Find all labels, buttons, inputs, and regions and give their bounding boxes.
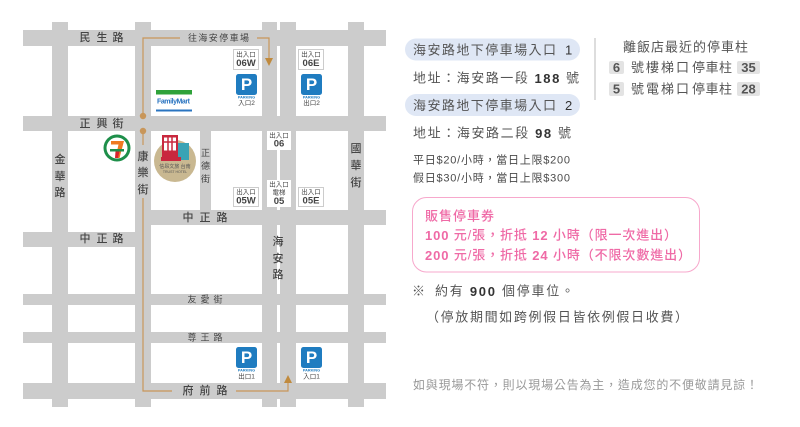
road labels: 正 [80, 117, 90, 130]
road labels: 街 [112, 116, 124, 130]
road labels: 正 [201, 148, 210, 158]
icon: FamilyMart: FamilyMart [157, 98, 191, 106]
road labels: 樂 [138, 165, 148, 179]
entrance 2 heading [405, 94, 580, 116]
road labels: 王 [200, 332, 210, 342]
icon: FamilyMart [156, 90, 192, 112]
arrow: down to entrance 2 [265, 58, 273, 66]
road labels: 華 [54, 170, 66, 183]
holiday rate: 假日$30/小時，當日上限$300 [413, 170, 570, 184]
pillar row 1 [609, 60, 760, 75]
road labels: 金 [54, 152, 66, 166]
entrance 2 heading: 2 [565, 98, 572, 113]
label: elevator exit 05: 05 [274, 196, 285, 207]
divider [594, 38, 596, 100]
road labels: 安 [272, 251, 284, 265]
label: exit 06E [298, 50, 324, 70]
icon: parking entrance 2: PARKING [238, 96, 255, 100]
entrance 1 heading: 1 [565, 42, 572, 58]
label: exit 06 [267, 130, 291, 150]
callout: parking vouchers: 販售停車券 [425, 208, 494, 224]
icon: parking exit 2: PARKING [303, 96, 320, 100]
pillar row 2: 5 [613, 82, 620, 96]
pillar row 2: 停車柱 [692, 82, 732, 96]
icon: parking entrance 2 [236, 74, 257, 107]
icon: parking exit 1 [236, 347, 257, 380]
label: elevator exit 05 [267, 180, 291, 207]
road labels: 生 [96, 30, 108, 44]
route junction dots [140, 113, 146, 134]
road labels: 中 [80, 231, 90, 245]
road labels: 尊 [187, 332, 197, 342]
label: exit 06E: 06E [303, 58, 319, 69]
entrance 1 heading: 海安路地下停車場入口 [413, 42, 556, 58]
note: holiday charge: （停放期間如跨例假日皆依例假日收費） [426, 310, 688, 324]
callout: parking vouchers: 200 元/張，折抵 24 小時（不限次數進出） [425, 248, 691, 262]
entrance 2 heading: 海安路地下停車場入口 [413, 98, 556, 113]
road labels: 路 [112, 30, 124, 44]
road labels: 路 [216, 210, 228, 224]
label: elevator exit 05: 出入口 [269, 180, 289, 188]
label: exit 06W [234, 50, 258, 70]
entrance 2 address: 地址：海安路二段 98 號 [413, 126, 571, 140]
label: exit 05E [298, 187, 324, 206]
disclaimer: 如與現場不符，則以現場公告為主，造成您的不便敬請見諒！ [413, 377, 758, 392]
pillar row 2: 28 [741, 82, 756, 96]
label: exit 06: 出入口 [269, 130, 289, 140]
pillar row 1: 6 [613, 60, 620, 75]
icon: parking exit 2: P [306, 75, 317, 94]
icon: parking exit 1: PARKING [238, 368, 255, 372]
icon: hotel logo: TRUST HOTEL [163, 170, 187, 174]
entrance 1 address: 地址：海安路一段 188 號 [413, 70, 579, 86]
street map [23, 22, 386, 407]
road labels: 國 [350, 142, 362, 155]
icon: parking entrance 2: P [241, 75, 252, 94]
road labels: 康 [138, 149, 148, 163]
callout: parking vouchers: 100 元/張，折抵 12 小時（限一次進出） [425, 228, 677, 242]
entrance 1 heading [405, 38, 580, 60]
road labels: 街 [138, 182, 148, 196]
road labels: 路 [54, 185, 66, 199]
road labels: 街 [201, 173, 210, 184]
icon: parking exit 2 [301, 74, 322, 107]
icon: parking exit 1: P [241, 348, 252, 367]
icon: parking entrance 1: 入口1 [303, 372, 320, 380]
road labels [54, 30, 362, 397]
label: exit 06: 06 [274, 138, 284, 150]
road labels: 前 [200, 383, 210, 397]
road labels: 愛 [200, 294, 210, 304]
weekday rate: 平日$20/小時，當日上限$200 [413, 154, 570, 166]
pillar row 1: 號樓梯口 [631, 60, 689, 75]
pillar row 2 [609, 82, 760, 96]
road labels: 正 [96, 232, 108, 245]
road labels: 路 [112, 231, 124, 245]
icon: parking entrance 1 [301, 347, 322, 380]
label: exit 05W: 05W [236, 196, 256, 206]
note: parking capacity: ※ [412, 284, 425, 298]
road labels: 德 [201, 160, 210, 171]
road labels: 民 [80, 32, 90, 44]
icon: parking entrance 1: P [306, 348, 317, 367]
panel: parking entrances [405, 38, 580, 184]
road labels: 正 [200, 211, 210, 224]
road labels: 街 [350, 175, 362, 189]
note: parking capacity: 約有 900 個停車位。 [435, 284, 574, 298]
label: elevator exit 05: 電梯 [272, 188, 286, 196]
pillar row 2: 號電梯口 [631, 82, 689, 96]
label: exit 05E: 出入口 [301, 187, 321, 196]
label: exit 06W: 06W [236, 58, 256, 69]
road labels: 華 [350, 159, 362, 172]
icon: parking exit 1: 出口1 [238, 372, 255, 380]
label: exit 05E: 05E [303, 196, 319, 206]
route lines [143, 38, 288, 391]
road labels: 海 [272, 234, 284, 248]
icon: parking entrance 1: PARKING [303, 368, 320, 372]
icon: 7-Eleven [104, 134, 130, 162]
road labels: 往海安停車場 [188, 32, 249, 43]
arrow: up to entrance 1 [284, 375, 292, 383]
icon: parking exit 2: 出口2 [303, 98, 320, 107]
label: exit 06W: 出入口 [236, 50, 256, 58]
panel: nearest pillars [609, 40, 760, 96]
road labels: 街 [213, 294, 223, 304]
label: exit 06E: 出入口 [301, 50, 321, 58]
road labels: 友 [187, 294, 197, 304]
icon: hotel logo: 信昂文旅 台南 [159, 163, 191, 170]
road network [23, 22, 386, 407]
road labels: 路 [216, 383, 228, 397]
road labels: 興 [96, 117, 108, 130]
road labels: 路 [213, 332, 223, 342]
road labels: 中 [182, 210, 194, 224]
label: exit 05W [234, 187, 258, 206]
icon: parking entrance 2: 入口2 [238, 99, 255, 107]
pillar row 1: 35 [741, 60, 756, 75]
callout: parking vouchers [412, 198, 700, 272]
pillars heading: 離飯店最近的停車柱 [623, 40, 748, 54]
road labels: 府 [182, 383, 194, 397]
pillar row 1: 停車柱 [692, 60, 732, 75]
label: exit 05W: 出入口 [236, 187, 256, 196]
icon: hotel logo [154, 135, 196, 182]
road labels: 路 [272, 267, 284, 281]
